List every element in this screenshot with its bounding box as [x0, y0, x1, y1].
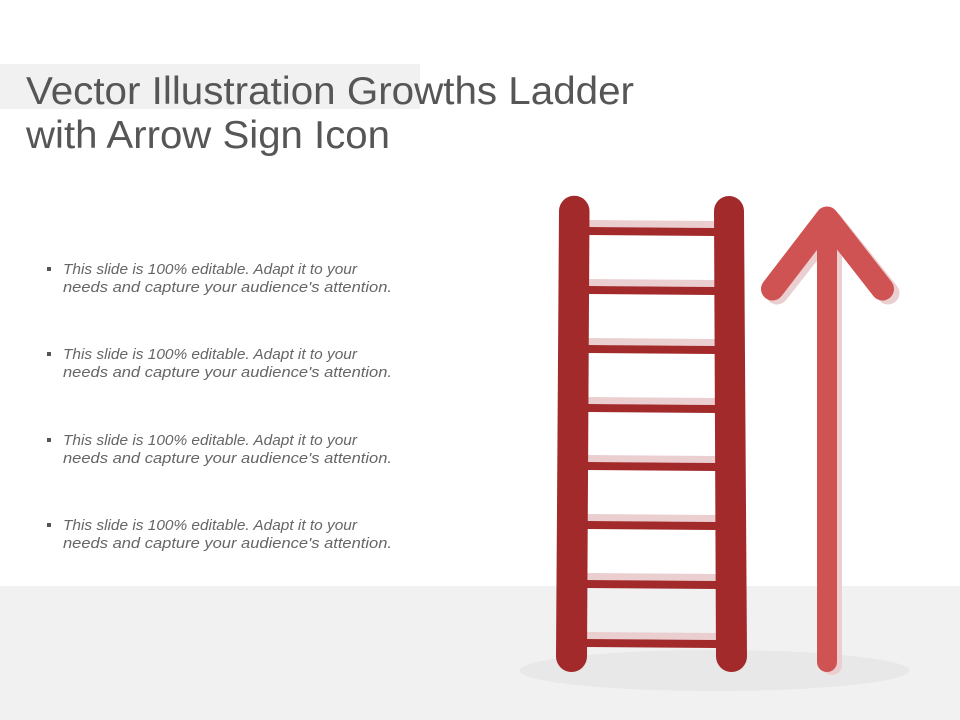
- bullet item 4: This slide is 100% editable. Adapt it to your: [63, 518, 358, 534]
- bullet item 2: [47, 347, 392, 381]
- ground shadow: [520, 650, 910, 691]
- bullet item 1: This slide is 100% editable. Adapt it to your: [63, 262, 358, 278]
- icon: ladder: [556, 196, 747, 672]
- floor band: [0, 586, 960, 720]
- bullet item 4: needs and capture your audience's attention.: [63, 536, 392, 552]
- ladder rung shadows: [586, 220, 717, 640]
- bullet item 1: [47, 262, 392, 296]
- ladder rungs: [586, 227, 717, 648]
- bullet item 4: [47, 518, 392, 552]
- bullet list: [47, 262, 392, 552]
- title: with Arrow Sign Icon: [25, 114, 390, 157]
- title: Vector Illustration Growths Ladder: [26, 70, 634, 113]
- title: [25, 70, 634, 157]
- bullet item 2: This slide is 100% editable. Adapt it to your: [63, 347, 358, 363]
- bullet item 2: needs and capture your audience's attention.: [63, 365, 392, 381]
- icon: up arrow: [772, 218, 888, 665]
- bullet item 3: [47, 433, 392, 467]
- arrow shadow: [777, 222, 888, 665]
- ladder right rail: [714, 196, 747, 672]
- bullet item 1: needs and capture your audience's attention.: [63, 280, 392, 296]
- bullet item 3: This slide is 100% editable. Adapt it to your: [63, 433, 358, 449]
- title accent band: [0, 64, 420, 109]
- bullet item 3: needs and capture your audience's attention.: [63, 451, 392, 467]
- ladder left rail: [556, 196, 590, 672]
- arrow body: [772, 218, 882, 662]
